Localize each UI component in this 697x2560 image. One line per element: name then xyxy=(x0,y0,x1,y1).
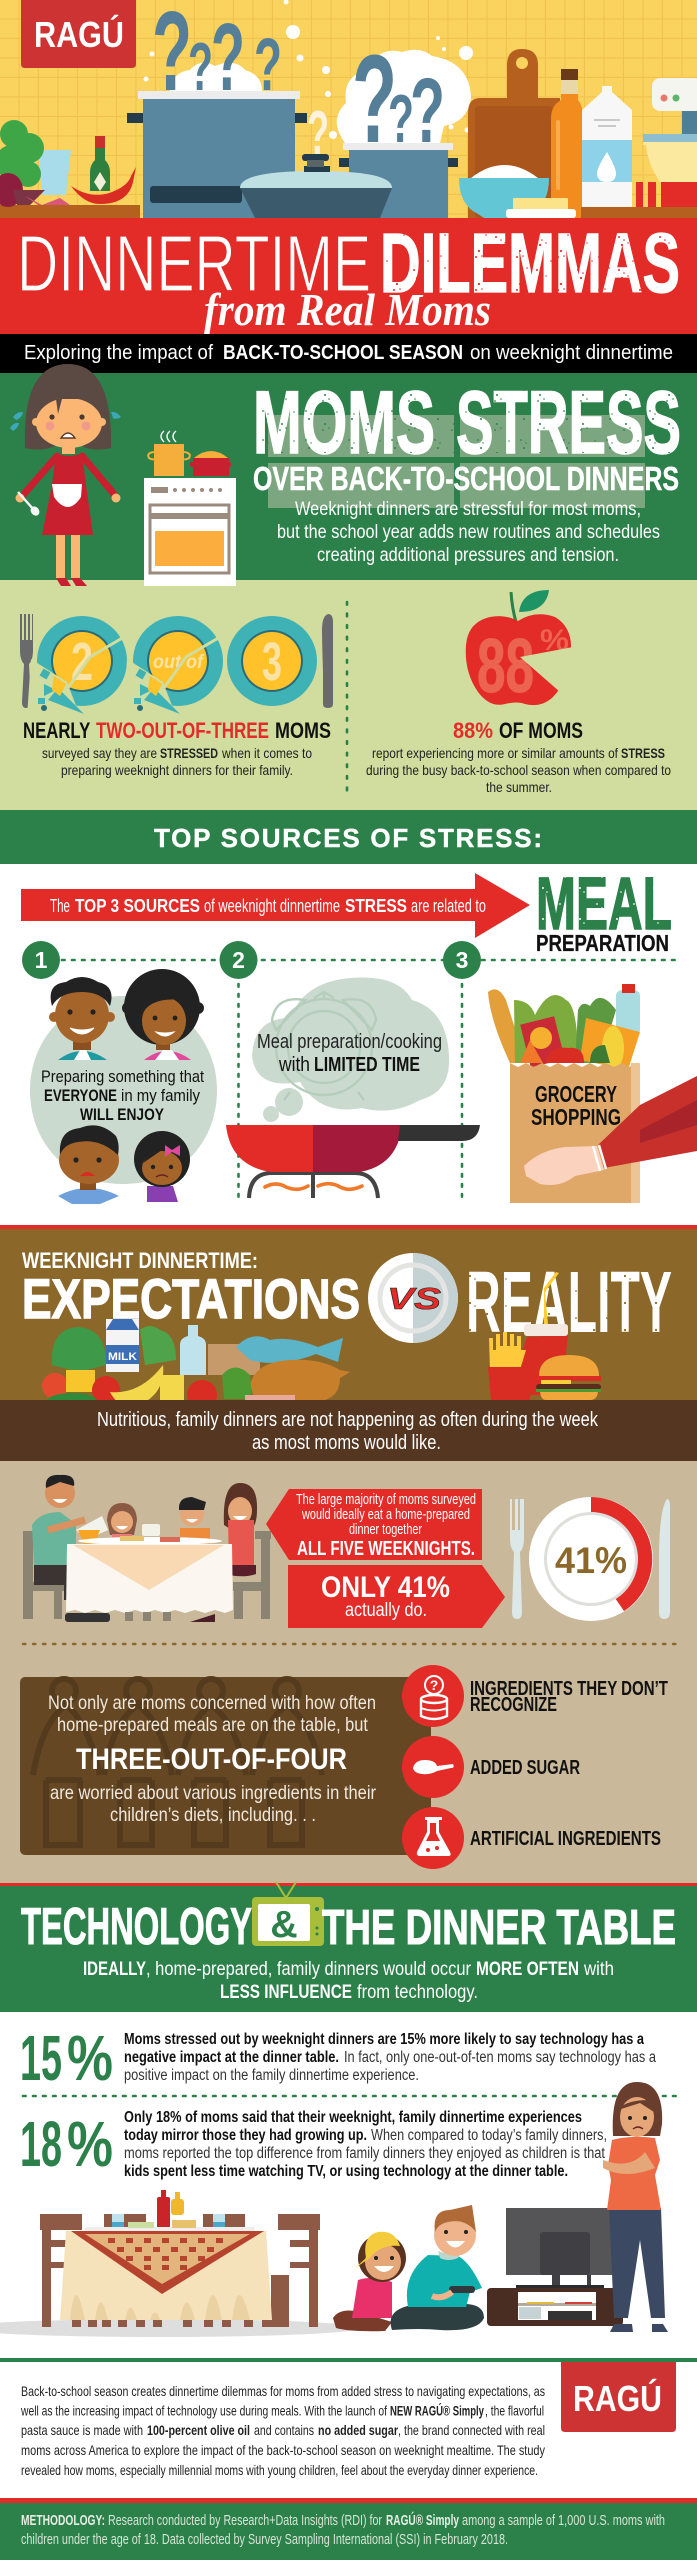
panel: stats on light green xyxy=(0,364,697,810)
text: grocery shopping: GROCERY xyxy=(535,1081,617,1107)
title: DINNERTIME: DINNERTIME xyxy=(17,219,371,308)
text: back-to-school paragraph: revealed how moms, especially millennial moms with young children, feel about the everyday dinner experience. xyxy=(21,2462,538,2478)
logo: Ragu header xyxy=(21,0,136,68)
text: ideally: , home-prepared, family dinners would occur xyxy=(146,1958,471,1980)
icon: steam bubbles xyxy=(144,0,473,139)
heading: technology: TECHNOLOGY xyxy=(21,1898,252,1956)
text: grocery shopping: SHOPPING xyxy=(531,1104,621,1130)
text: back-to-school paragraph: moms across America to explore the impact of the back-to-school season on weeknight mealtime. The study xyxy=(21,2442,545,2458)
heading: preparation: PREPARATION xyxy=(536,930,669,956)
heading: top sources of stress: TOP SOURCES OF STRESS: xyxy=(154,823,542,853)
heading: nearly two-out-of-three moms: MOMS xyxy=(275,718,331,743)
text: methodology: RAGÚ® Simply xyxy=(386,2511,459,2529)
arrow: top 3 sources: are related to xyxy=(411,896,486,916)
text: 15% detail xyxy=(124,2031,656,2084)
text: stress intro: Weeknight dinners are stressful for most moms, xyxy=(295,498,641,520)
icon: tv ampersand xyxy=(252,1882,324,1946)
panel: three out of four xyxy=(20,1677,431,1855)
icon: question marks above large pot: ? xyxy=(188,29,213,105)
icon: stressed mom xyxy=(10,364,121,586)
text: ideally: from technology. xyxy=(357,1981,478,2003)
icon: knife xyxy=(322,614,333,708)
callout: all five weeknights: ALL FIVE WEEKNIGHTS. xyxy=(297,1537,475,1560)
icon: large pot xyxy=(127,91,307,218)
icon: mom xyxy=(122,969,204,1060)
stat: 15%: 15 xyxy=(20,2022,62,2094)
icon: apple 88%: 88 xyxy=(477,624,534,709)
illustration: thought cloud with clock xyxy=(252,977,449,1122)
icon: unknown ingredient can xyxy=(402,1665,464,1727)
text: limited time: with xyxy=(278,1054,310,1076)
text: back-to-school paragraph xyxy=(20,2383,545,2478)
text: limited time: LIMITED TIME xyxy=(314,1054,420,1076)
icon: flask xyxy=(402,1807,464,1869)
logo: Ragu footer xyxy=(561,2362,676,2432)
icon: fork xyxy=(20,614,33,708)
icon: steam cloud left xyxy=(170,63,262,91)
icon: number 2: 2 xyxy=(232,947,245,973)
label: added sugar: ADDED SUGAR xyxy=(470,1757,580,1779)
heading: MOMS STRESS: MOMS xyxy=(253,372,435,472)
chart: 41% donut on plate: 41% xyxy=(555,1540,627,1581)
arrow: top 3 sources: STRESS xyxy=(345,896,407,916)
heading: three-out-of-four: THREE-OUT-OF-FOUR xyxy=(76,1743,347,1776)
icon: small pot xyxy=(339,143,458,218)
texture: distress on heading xyxy=(253,390,681,453)
text: stressed explanation: preparing weeknight dinners for their family. xyxy=(61,762,293,778)
icon: boy xyxy=(58,1125,119,1204)
panel: technology and the dinner table xyxy=(0,1882,697,2012)
subtitle: from Real Moms: from Real Moms xyxy=(204,284,491,335)
icon: milk carton xyxy=(582,86,632,207)
text: 88% explanation: report experiencing more or similar amounts of xyxy=(372,745,618,761)
text: everyone will enjoy xyxy=(41,1067,204,1124)
text: 88% explanation: STRESS xyxy=(621,745,665,761)
text: stress intro: creating additional pressures and tension. xyxy=(317,544,619,566)
panel: black strapline xyxy=(0,334,697,373)
text: methodology: Research conducted by Research+Data Insights (RDI) for xyxy=(108,2513,382,2529)
text: back-to-school paragraph: pasta sauce is made with xyxy=(21,2422,143,2438)
panel: kitchen header xyxy=(0,0,697,218)
icon: stand mixer xyxy=(581,78,697,218)
text: nutritious dinners: Nutritious, family dinners are not happening as often during the week xyxy=(97,1409,599,1431)
icon: number 1 xyxy=(22,941,60,979)
callout: all five weeknights: The large majority of moms surveyed xyxy=(296,1492,476,1508)
text: 88% explanation: the summer. xyxy=(486,779,552,795)
text: strapline: BACK-TO-SCHOOL SEASON xyxy=(223,342,463,364)
panel: moms stress xyxy=(0,372,697,580)
icon: oil bottle xyxy=(551,69,583,218)
text: nutritious dinners xyxy=(97,1409,599,1454)
logo: Ragu footer: RAGÚ xyxy=(573,2377,662,2419)
logo: Ragu header: RAGÚ xyxy=(34,13,124,55)
text: everyone will enjoy: EVERYONE xyxy=(44,1086,117,1105)
text: back-to-school paragraph: no added sugar xyxy=(318,2422,398,2438)
text: limited time: Meal preparation/cooking xyxy=(257,1031,442,1053)
icon: boy xyxy=(179,1497,210,1544)
heading: weeknight dinnertime: WEEKNIGHT DINNERTIME: xyxy=(22,1248,258,1273)
text: back-to-school paragraph: NEW RAGÚ® Simply xyxy=(390,2402,484,2418)
icon: vs plate: VS xyxy=(387,1281,441,1316)
illustration: family bubble xyxy=(30,969,217,1204)
illustration: family dinner table empty xyxy=(0,2190,360,2337)
icon: boy with controller xyxy=(391,2205,484,2330)
text: moms concerned: Not only are moms concerned with how often xyxy=(48,1692,376,1714)
panel: about the study xyxy=(0,2362,697,2498)
text: everyone will enjoy: in my family xyxy=(121,1086,200,1105)
illustration: healthy foods xyxy=(42,1319,350,1410)
icon: mom xyxy=(224,1483,257,1576)
arrow: top 3 sources xyxy=(21,873,530,938)
illustration: kids playing video games xyxy=(333,2205,484,2331)
icon: steam cloud right xyxy=(337,50,471,143)
heading: nearly two-out-of-three moms: NEARLY xyxy=(23,718,91,743)
text: everyone will enjoy: Preparing something that xyxy=(41,1067,204,1086)
text: 18% detail: moms reported the top difference from family dinners they enjoyed as children is that xyxy=(124,2145,606,2162)
text: everyone will enjoy: WILL ENJOY xyxy=(80,1105,165,1124)
icon: plate 2 xyxy=(27,616,127,716)
illustration: tv and console xyxy=(487,2208,623,2326)
text: back-to-school paragraph: Back-to-school season creates dinnertime dilemmas for moms from added stress to navigating expectations, as xyxy=(21,2383,545,2399)
text: ideally: LESS INFLUENCE xyxy=(220,1981,352,2003)
icon: tablecloth xyxy=(66,1544,233,1613)
icon: unknown ingredient can: ? xyxy=(430,1677,438,1693)
chart: 41% donut on plate xyxy=(529,1497,653,1621)
text: methodology: METHODOLOGY: xyxy=(21,2513,105,2529)
icon: arm and hand xyxy=(524,1076,697,1185)
icon: plate 3 xyxy=(227,616,317,706)
text: worried: children’s diets, including. . . xyxy=(110,1804,316,1826)
text: stressed explanation: STRESSED xyxy=(160,745,218,761)
icon: knife xyxy=(659,1499,670,1619)
icon: plate 3: 3 xyxy=(262,632,282,692)
text: back-to-school paragraph: and contains xyxy=(254,2422,314,2438)
icon: question marks above small pot: ? xyxy=(352,30,397,169)
text: strapline: on weeknight dinnertime xyxy=(470,342,673,364)
texture: distress on DILEMMAS xyxy=(380,230,680,294)
icon: plate out of: out of xyxy=(153,652,205,673)
text: methodology xyxy=(21,2511,665,2548)
arrow: top 3 sources: of weeknight dinnertime xyxy=(204,896,340,916)
icon: number 1: 1 xyxy=(35,947,48,973)
text: worried: are worried about various ingredients in their xyxy=(50,1782,376,1804)
icon: question marks above large pot xyxy=(152,0,282,114)
icon: vegetables and condiments xyxy=(0,120,140,218)
text: 18% detail: When compared to today’s family dinners, xyxy=(371,2127,607,2144)
heading: expectations: EXPECTATIONS xyxy=(22,1267,360,1330)
icon: condiments and glasses xyxy=(85,2190,255,2232)
illustration: fast food xyxy=(488,1272,601,1400)
icon: question marks above small pot: ? xyxy=(410,60,445,162)
arrow: top 3 sources: The xyxy=(50,896,70,916)
icon: spoon of sugar xyxy=(402,1736,464,1798)
text: stress intro xyxy=(277,498,660,566)
icon: plate 2: 2 xyxy=(71,632,93,692)
icon: tv ampersand: & xyxy=(270,1904,298,1946)
callout: all five weeknights xyxy=(266,1489,482,1560)
text: stressed explanation xyxy=(42,745,312,778)
stat: 18%: % xyxy=(67,2108,113,2180)
icon: question marks above small pot: ? xyxy=(388,81,414,157)
icon: girl with cap xyxy=(333,2232,406,2331)
text: stressed explanation: when it comes to xyxy=(221,745,312,761)
icon: white question mark steam: ? xyxy=(307,99,329,168)
callout: all five weeknights: dinner together xyxy=(349,1522,422,1538)
text: back-to-school paragraph: , the flavorful xyxy=(485,2402,544,2418)
text: 88% explanation xyxy=(366,745,671,795)
icon: family outlines xyxy=(33,1679,322,1845)
panel: top sources of stress banner xyxy=(0,810,697,864)
icon: vs plate xyxy=(368,1253,458,1343)
heading: 88% of moms: 88% xyxy=(453,718,493,743)
illustration: grocery bag xyxy=(488,984,697,1203)
text: back-to-school paragraph: well as the increasing impact of technology use during meals. With the launch of xyxy=(20,2402,387,2418)
icon: stove with pots xyxy=(144,431,236,586)
panel: technology stats xyxy=(0,2012,697,2358)
texture: distress on reality xyxy=(466,1270,672,1332)
panel: sources of stress xyxy=(0,862,697,1225)
text: 18% detail xyxy=(124,2109,607,2180)
label: ingredients they don't recognize: RECOGNIZE xyxy=(470,1694,557,1716)
text: worried xyxy=(50,1782,376,1826)
panel: title banner xyxy=(0,216,697,334)
callout: only 41%: actually do. xyxy=(345,1600,427,1621)
icon: frying pan with lid xyxy=(150,154,392,218)
icon: number 3 xyxy=(443,941,481,979)
icon: dad xyxy=(49,977,115,1060)
text: 15% detail: negative impact at the dinner table. xyxy=(124,2049,339,2066)
panel: expectations vs reality xyxy=(0,1229,697,1410)
icon: cutting board xyxy=(468,49,560,218)
label: ingredients they don't recognize xyxy=(470,1678,668,1716)
text: limited time xyxy=(257,1031,442,1076)
illustration: family dinner table xyxy=(23,1475,271,1622)
callout: only 41% xyxy=(288,1565,505,1628)
text: strapline: Exploring the impact of xyxy=(24,342,213,364)
translucent layout blocks xyxy=(268,415,645,508)
panel: dark intro band xyxy=(0,1400,697,1461)
icon: plate out of xyxy=(123,616,223,716)
text: ideally xyxy=(83,1958,614,2003)
text: methodology: children under the age of 18. Data collected by Survey Sampling International (SSI) in February 2018. xyxy=(21,2532,508,2548)
icon: table settings xyxy=(78,1524,222,1550)
callout: all five weeknights: would ideally eat a home-prepared xyxy=(301,1507,470,1523)
icon: apple 88% xyxy=(466,590,573,709)
icon: girl xyxy=(107,1503,137,1544)
text: 18% detail: kids spent less time watching TV, or using technology at the dinner table. xyxy=(124,2163,568,2180)
texture: distress on meal xyxy=(536,876,672,929)
panel: methodology xyxy=(0,2498,697,2560)
text: back-to-school paragraph: 100-percent olive oil xyxy=(147,2422,250,2438)
text: ideally: MORE OFTEN xyxy=(476,1958,579,1980)
text: ideally: IDEALLY xyxy=(83,1958,146,1980)
stat: 18%: 18 xyxy=(20,2108,62,2180)
divider: red rule xyxy=(0,1225,697,1229)
text: nutritious dinners: as most moms would like. xyxy=(252,1432,441,1454)
callout: only 41%: ONLY 41% xyxy=(321,1571,450,1604)
illustration: mom arms crossed xyxy=(603,2082,668,2332)
text: ideally: with xyxy=(583,1958,614,1980)
text: grocery shopping xyxy=(531,1081,621,1130)
heading: nearly two-out-of-three moms: TWO-OUT-OF-THREE xyxy=(96,718,269,743)
heading: 88% of moms: OF MOMS xyxy=(499,718,583,743)
icon: question marks above large pot: ? xyxy=(211,4,245,111)
text: 18% detail: Only 18% of moms said that their weeknight, family dinnertime experiences xyxy=(124,2109,582,2126)
icon: frying pan on burner xyxy=(226,1125,480,1198)
stat: 15%: % xyxy=(67,2022,113,2094)
icon: apple 88%: % xyxy=(540,624,569,657)
icon: tablecloth xyxy=(60,2231,272,2320)
icon: flour bowl and butter xyxy=(459,165,576,218)
icon: question marks above large pot: ? xyxy=(254,23,282,106)
icon: number 3: 3 xyxy=(456,947,468,973)
text: stressed explanation: surveyed say they are xyxy=(42,745,157,761)
text: back-to-school paragraph: , the brand connected with real xyxy=(398,2422,545,2438)
divider: green rule xyxy=(0,2358,697,2362)
text: 18% detail: today mirror those they had growing up. xyxy=(124,2127,367,2144)
text: moms concerned xyxy=(48,1692,376,1736)
icon: fork xyxy=(510,1499,524,1619)
icon: girl xyxy=(134,1131,190,1202)
panel: tan family section xyxy=(0,1461,697,1883)
text: 15% detail: positive impact on the family dinnertime experience. xyxy=(124,2067,419,2084)
illustration: healthy foods: MILK xyxy=(108,1351,137,1363)
text: moms concerned: home-prepared meals are on the table, but xyxy=(57,1714,368,1736)
icon: dad pouring xyxy=(32,1475,108,1600)
divider: red rule two xyxy=(0,1883,697,1886)
icon: number 2 xyxy=(220,941,258,979)
arrow: top 3 sources: TOP 3 SOURCES xyxy=(75,896,200,916)
